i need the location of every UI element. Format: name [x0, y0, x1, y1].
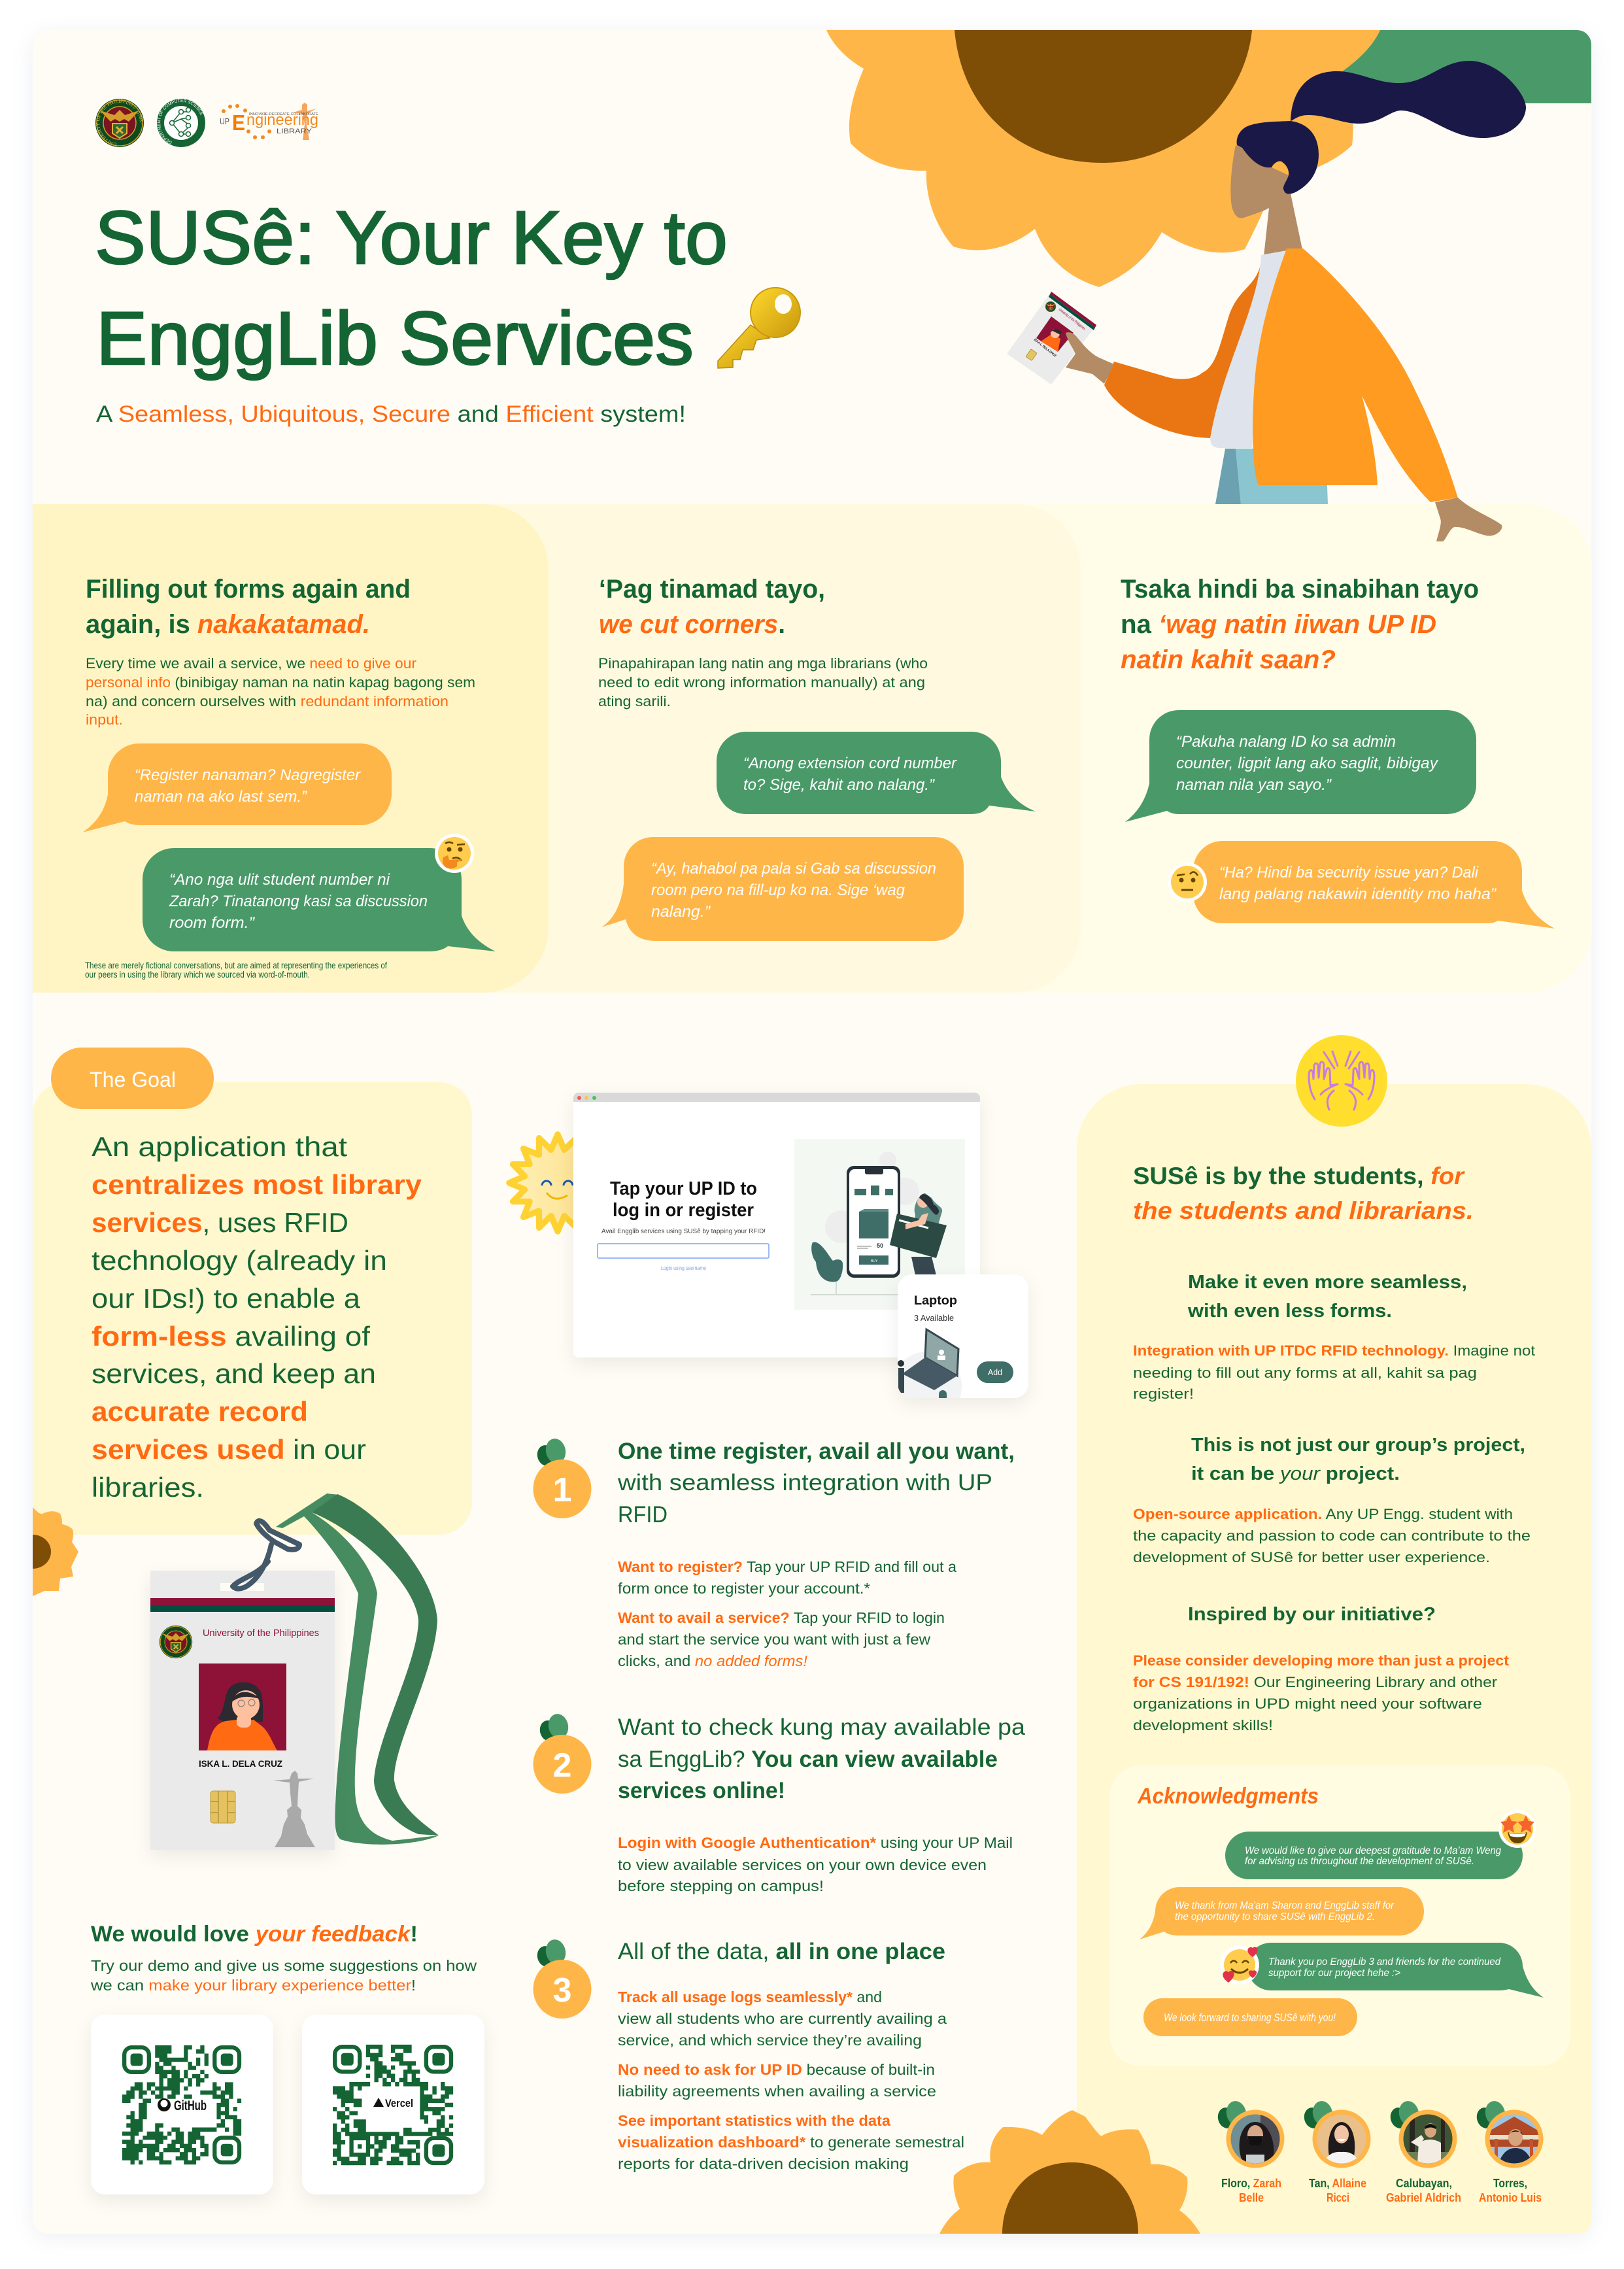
heading: Filling out forms again and — [86, 575, 411, 604]
avatar: Gabriel Aldrich Calubayan — [1386, 2099, 1461, 2204]
ack bubble 3 — [1247, 1943, 1544, 1998]
section: inspired: for CS 191/192! Our Engineering Library and other — [1133, 1674, 1497, 1690]
logos — [95, 99, 319, 147]
ack bubble 2 — [1140, 1887, 1424, 1939]
add button — [977, 1361, 1013, 1383]
logo: UP Engineering Library: INNOVATE·RECREATE·COLLABORATE — [249, 112, 319, 116]
goal text: services, uses RFID — [92, 1207, 348, 1238]
lanyard — [276, 1493, 439, 1845]
heading — [1133, 1163, 1474, 1224]
hand — [1435, 498, 1502, 541]
body text: personal info (binibigay naman na natin kapag bagong sem — [86, 674, 475, 691]
heading: the students and librarians. — [1133, 1197, 1474, 1224]
panel: three problems, right — [981, 504, 1592, 993]
speech bubble green: to? Sige, kahit ano nalang.” — [743, 776, 935, 794]
pill: the goal: The Goal — [90, 1068, 176, 1091]
GitHub logo: GitHub — [174, 2098, 207, 2113]
step 2 heading: services online! — [618, 1778, 785, 1803]
heading — [599, 575, 825, 639]
goal text: technology (already in — [92, 1245, 387, 1276]
step 1 heading: RFID — [618, 1502, 668, 1527]
speech bubble green — [717, 732, 1036, 814]
panel: the goal — [33, 1048, 472, 1535]
heading: Tsaka hindi ba sinabihan tayo — [1121, 575, 1479, 604]
speech bubble orange: “Ha? Hindi ba security issue yan? Dali — [1219, 864, 1479, 881]
avatar: Zarah Floro: Floro, Zarah — [1221, 2177, 1281, 2190]
speech bubble orange: nalang.” — [651, 903, 711, 921]
panel: acknowledgments: Acknowledgments — [1137, 1784, 1319, 1809]
step 2 — [533, 1712, 1026, 1894]
ack bubble 2: We thank from Ma’am Sharon and EnggLib staff for — [1175, 1900, 1395, 1911]
section: your project: the capacity and passion to code can contribute to the — [1133, 1527, 1531, 1544]
step 3 text: liability agreements when availing a service — [618, 2083, 936, 2100]
step 1 badge: 1 — [553, 1471, 571, 1509]
Vercel logo — [373, 2097, 413, 2109]
step 1 heading — [617, 1439, 1015, 1527]
body text: Every time we avail a service, we need to give our — [86, 655, 416, 672]
title: EnggLib Services — [96, 297, 694, 381]
step 1 text: Want to avail a service? Tap your RFID to login — [618, 1609, 945, 1626]
speech bubble green: naman nila yan sayo.” — [1176, 776, 1332, 794]
avatar: Zarah Floro: Belle — [1239, 2191, 1264, 2204]
avatar: Allaine Tan: Ricci — [1327, 2191, 1349, 2204]
icon: thinking emoji — [435, 834, 474, 873]
heading — [86, 575, 411, 639]
speech bubble green: “Anong extension cord number — [743, 755, 957, 772]
chip — [211, 1791, 235, 1823]
section: inspired: Please consider developing more than just a project — [1133, 1652, 1510, 1669]
goal text: accurate record — [92, 1396, 308, 1427]
team avatars — [1215, 2099, 1543, 2204]
ack bubble 4 — [1143, 1998, 1357, 2036]
step 3 text: reports for data-driven decision making — [618, 2155, 909, 2172]
step 1 heading: with seamless integration with UP — [617, 1470, 992, 1495]
section: more seamless — [1133, 1272, 1535, 1402]
title: SUSê: Your Key to — [95, 196, 728, 280]
ack bubble 1 — [1225, 1832, 1523, 1879]
feedback section — [90, 1922, 484, 2194]
avatar: Antonio Luis Torres: Torres, — [1493, 2177, 1527, 2190]
icon: key — [718, 288, 800, 368]
green corner block — [1327, 30, 1591, 103]
speech bubble orange: lang palang nakawin identity mo haha” — [1219, 885, 1497, 903]
step 2 text: before stepping on campus! — [618, 1877, 824, 1894]
step 3 text: view all students who are currently availing a — [618, 2010, 947, 2027]
heading: SUSê is by the students, for — [1133, 1163, 1466, 1189]
seal on card — [160, 1626, 192, 1658]
subtitle: A Seamless, Ubiquitous, Secure and Efficient system! — [96, 401, 686, 427]
body text: Pinapahirapan lang natin ang mga librarians (who — [598, 655, 928, 672]
section: inspired — [1133, 1604, 1510, 1733]
speech bubble orange: “Ay, hahabol pa pala si Gab sa discussion — [651, 860, 936, 878]
mini availability card — [897, 1274, 1029, 1405]
step 2 heading: Want to check kung may available pa — [618, 1715, 1026, 1740]
ID card: University of the Philippines — [203, 1628, 319, 1639]
Vercel logo: Vercel — [385, 2097, 413, 2109]
footnote — [85, 960, 387, 980]
avatar: Allaine Tan: Tan, Allaine — [1309, 2177, 1366, 2190]
step 3 text: See important statistics with the data — [618, 2112, 890, 2129]
section: your project: Open-source application. Any UP Engg. student with — [1133, 1506, 1513, 1522]
illustration: phone shopping — [794, 1139, 965, 1310]
step 2 text — [618, 1834, 1013, 1894]
step 3 text: No need to ask for UP ID because of built-in — [618, 2061, 935, 2078]
ack bubble 4: We look forward to sharing SUSê with you! — [1164, 2011, 1336, 2024]
ID card — [150, 1571, 335, 1850]
logo: UP Engineering Library: LIBRARY — [277, 128, 313, 135]
browser mockup: Login using username — [661, 1265, 706, 1271]
section: more seamless: with even less forms. — [1187, 1301, 1392, 1322]
login heading — [610, 1178, 757, 1221]
icon: high five — [1296, 1035, 1387, 1127]
ack bubble 1: for advising us throughout the development of SUSê. — [1245, 1856, 1474, 1867]
ack bubble 3: support for our project hehe :> — [1268, 1968, 1400, 1979]
section: more seamless: register! — [1133, 1386, 1194, 1402]
step 2 text: to view available services on your own device even — [618, 1856, 987, 1873]
heading: again, is nakakatamad. — [86, 610, 370, 639]
section: inspired: development skills! — [1133, 1717, 1273, 1733]
heading — [1121, 575, 1479, 674]
speech bubble green — [143, 848, 496, 951]
step 2 badge: 2 — [553, 1747, 571, 1784]
logo: UP seal: UNIVERSITY OF THE PHILIPPINES · 1908 · — [96, 99, 143, 146]
heading: we cut corners. — [599, 610, 785, 639]
goal text: libraries. — [92, 1472, 204, 1503]
logo: UP Engineering Library: ngineering — [246, 111, 318, 129]
step 3 badge: 3 — [553, 1971, 571, 2009]
icon: star-eyes emoji — [1498, 1810, 1536, 1848]
logo: UP Engineering Library: E — [232, 111, 245, 135]
section: more seamless: Integration with UP ITDC RFID technology. Imagine not — [1133, 1342, 1535, 1359]
speech bubble orange: “Register nanaman? Nagregister — [135, 766, 361, 784]
icon: raised eyebrow emoji — [1168, 862, 1207, 902]
avatar: Gabriel Aldrich Calubayan: Gabriel Aldrich — [1386, 2191, 1461, 2204]
section: inspired: organizations in UPD might need your software — [1133, 1696, 1482, 1712]
oblation statue — [273, 1771, 315, 1847]
goal text: centralizes most library — [92, 1169, 422, 1200]
step 2 heading: sa EnggLib? You can view available — [618, 1747, 998, 1772]
ID card in hand: University of the Philippines — [1058, 308, 1086, 331]
footnote: our peers in using the library which we sourced via word-of-mouth. — [85, 969, 310, 980]
goal text — [92, 1131, 422, 1503]
browser mockup — [573, 1093, 980, 1357]
logo: UP Engineering Library: UP — [220, 116, 229, 126]
GitHub logo — [158, 2098, 207, 2113]
panel: by the students — [1077, 1035, 1591, 2234]
lanyard clip — [233, 1521, 299, 1589]
QR card: Vercel — [302, 2015, 484, 2194]
step 3 heading: All of the data, all in one place — [618, 1939, 945, 1964]
step 1 — [533, 1437, 1015, 1669]
RFID input — [598, 1244, 769, 1258]
step 1 heading: One time register, avail all you want, — [618, 1439, 1015, 1464]
feedback text: we can make your library experience better ! — [90, 1977, 416, 1994]
speech bubble orange: naman na ako last sem.” — [135, 788, 307, 806]
sun mascot — [509, 1134, 606, 1231]
panel: three problems, middle — [458, 504, 1081, 993]
illustration: phone shopping: 50 — [877, 1242, 883, 1249]
login heading: Tap your UP ID to — [610, 1178, 757, 1199]
heading: ‘Pag tinamad tayo, — [599, 575, 825, 604]
browser mockup: Avail Engglib services using SUSê by tapping your RFID! — [601, 1228, 766, 1235]
body text: need to edit wrong information manually) at ang — [598, 674, 925, 691]
illustration: woman holding ID — [1007, 61, 1526, 504]
ID card in hand: ISKA L. DELA CRUZ — [1033, 338, 1057, 358]
step 2 badge — [533, 1712, 591, 1794]
step 1 text: clicks, and no added forms! — [618, 1652, 808, 1669]
step 1 text — [618, 1558, 956, 1669]
speech bubble green: “Pakuha nalang ID ko sa admin — [1176, 733, 1396, 751]
avatar: Gabriel Aldrich Calubayan: Calubayan, — [1396, 2177, 1452, 2190]
goal text: services, and keep an — [92, 1358, 376, 1389]
step 1 text: and start the service you want with just a few — [618, 1631, 930, 1648]
pill: the goal — [51, 1048, 214, 1109]
speech bubble green: counter, ligpit lang ako saglit, bibigay — [1176, 755, 1439, 772]
section: more seamless: needing to fill out any forms at all, kahit sa pag — [1133, 1365, 1477, 1381]
feedback heading: We would love your feedback! — [91, 1922, 418, 1947]
step 3 — [533, 1937, 964, 2172]
ID card in hand — [1007, 292, 1096, 384]
goal text: An application that — [92, 1131, 347, 1162]
step 3 text: Track all usage logs seamlessly* and — [618, 1988, 882, 2005]
step 3 badge — [533, 1937, 591, 2019]
step 3 text: service, and which service they’re availing — [618, 2032, 922, 2049]
section: inspired: Inspired by our initiative? — [1188, 1604, 1436, 1625]
ID portrait — [199, 1663, 286, 1750]
step 1 text: Want to register? Tap your UP RFID and fill out a — [618, 1558, 956, 1575]
section: your project — [1133, 1435, 1531, 1565]
section: more seamless: Make it even more seamless, — [1188, 1272, 1467, 1293]
ack bubble 1: We would like to give our deepest gratitude to Ma’am Weng — [1245, 1845, 1501, 1856]
section: your project: development of SUSê for better user experience. — [1133, 1549, 1490, 1565]
mini availability card: Laptop — [914, 1294, 957, 1308]
bottom sunflower — [939, 2110, 1200, 2234]
add button: Add — [988, 1367, 1002, 1377]
illustration: laptop — [898, 1327, 962, 1398]
logo: computer science department: DEPARTMENT OF COMPUTER SCIENCE — [157, 99, 203, 145]
avatar: Zarah Floro — [1215, 2099, 1284, 2204]
title — [95, 196, 728, 381]
speech bubble orange — [601, 837, 964, 941]
step 2 text: Login with Google Authentication* using your UP Mail — [618, 1834, 1013, 1851]
speech bubble green: “Ano nga ulit student number ni — [169, 871, 390, 889]
ID card: ISKA L. DELA CRUZ — [199, 1758, 282, 1769]
body text — [598, 655, 928, 709]
logo: UP Engineering Library — [220, 103, 319, 140]
goal text: form-less availing of — [92, 1321, 370, 1352]
avatar: Antonio Luis Torres: Antonio Luis — [1479, 2191, 1542, 2204]
step 1 text: form once to register your account.* — [618, 1580, 870, 1597]
panel: three problems, left — [33, 504, 549, 993]
feedback text: Try our demo and give us some suggestions on how — [91, 1957, 477, 1974]
speech bubble green: Zarah? Tinatanong kasi sa discussion — [169, 893, 428, 910]
body text: ating sarili. — [598, 693, 671, 709]
goal text: services used in our — [92, 1434, 366, 1465]
body text: input. — [86, 711, 123, 728]
illustration: phone shopping: BUY — [871, 1259, 878, 1263]
speech bubble orange — [1193, 841, 1555, 929]
ack bubble 2: the opportunity to share SUSê with EnggLib 2. — [1175, 1911, 1375, 1922]
body text: na) and concern ourselves with redundant information — [86, 693, 448, 709]
small sunflower left — [33, 1507, 78, 1596]
heading: na ‘wag natin iiwan UP ID — [1121, 610, 1436, 639]
heading: natin kahit saan? — [1121, 645, 1336, 674]
avatar: Antonio Luis Torres — [1474, 2099, 1543, 2204]
section: your project: it can be your project. — [1191, 1463, 1400, 1484]
feedback text — [90, 1957, 477, 1994]
ack bubble 3: Thank you po EnggLib 3 and friends for the continued — [1268, 1956, 1501, 1968]
QR card: GitHub — [91, 2015, 273, 2194]
panel: acknowledgments — [1109, 1766, 1570, 2066]
step 2 heading — [618, 1715, 1026, 1803]
footnote: These are merely fictional conversations, but are aimed at representing the experiences of — [85, 960, 387, 970]
goal text: our IDs!) to enable a — [92, 1283, 361, 1314]
speech bubble green — [1125, 710, 1476, 822]
speech bubble orange: room pero na fill-up ko na. Sige ‘wag — [651, 881, 905, 899]
speech bubble green: room form.” — [169, 914, 255, 932]
section: your project: This is not just our group’s project, — [1191, 1435, 1525, 1456]
speech bubble orange — [82, 743, 392, 832]
login heading: log in or register — [613, 1200, 754, 1221]
step 1 badge — [533, 1437, 591, 1518]
step 3 text — [618, 1988, 964, 2172]
mini availability card: 3 Available — [914, 1313, 954, 1323]
avatar: Allaine Tan — [1302, 2099, 1370, 2204]
icon: smiling hearts emoji — [1220, 1945, 1259, 1985]
big sunflower — [826, 30, 1380, 287]
body text — [86, 655, 475, 728]
step 3 text: visualization dashboard* to generate semestral — [618, 2134, 964, 2151]
